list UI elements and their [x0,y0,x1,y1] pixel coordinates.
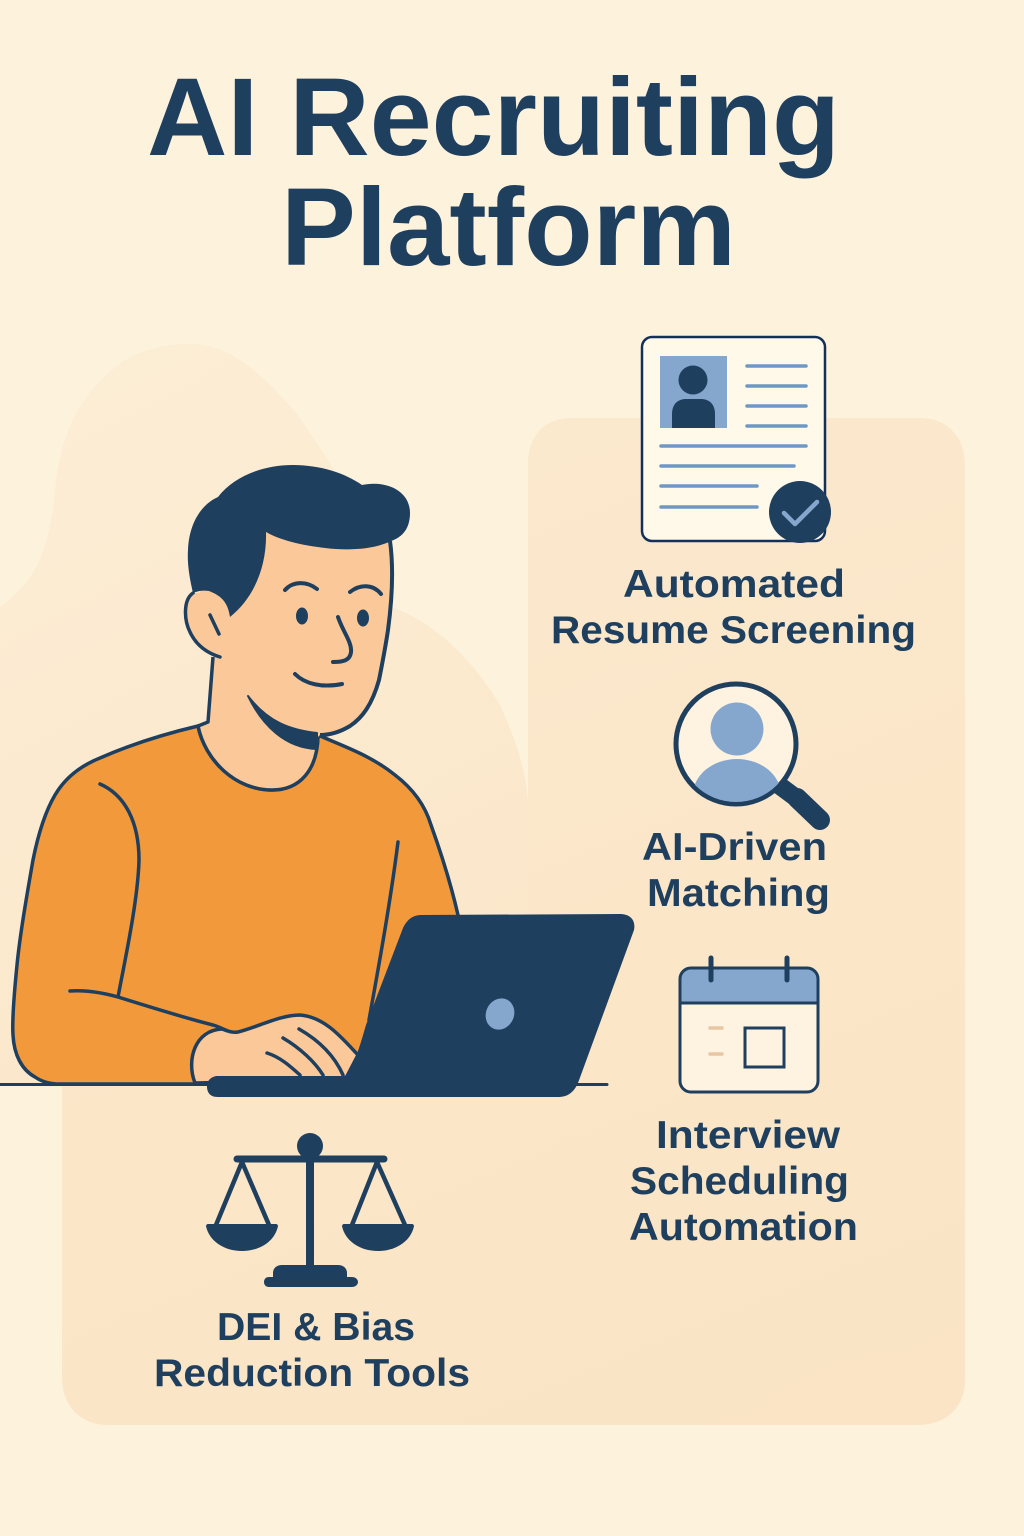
laptop logo [481,994,519,1034]
label [642,826,830,915]
label: Matching [647,872,830,915]
hand [192,1015,358,1083]
title [147,56,840,289]
label: Resume Screening [551,609,916,652]
face features [285,583,381,686]
title: Platform [281,166,736,289]
sweater fold lines [70,784,398,1032]
label: Scheduling [630,1160,849,1203]
label [154,1306,470,1395]
title: AI Recruiting [147,56,840,179]
label: Reduction Tools [154,1352,470,1395]
background blob [0,344,528,1100]
feature: interview scheduling automation [629,958,858,1249]
label: Interview [656,1114,841,1157]
ear [185,592,232,657]
icon: balance scales [206,1133,414,1287]
hair [188,465,410,617]
neck and face [198,532,392,790]
icon: resume [642,337,831,543]
chin shadow [248,696,317,749]
laptop [207,914,634,1097]
eyes [296,608,369,626]
fingers [267,1029,343,1075]
feature: ai-driven matching [642,684,830,915]
label: Automation [629,1206,858,1249]
orange sweater [13,726,458,1084]
feature: dei and bias reduction tools [154,1133,470,1395]
label: Automated [623,563,845,606]
label [629,1114,858,1249]
label [551,563,916,652]
label: DEI & Bias [217,1306,415,1349]
table line [0,1083,607,1086]
icon: magnifier with person [676,684,820,831]
feature: automated resume screening [551,337,916,652]
illustration: person at laptop [0,465,634,1097]
background panel [62,418,965,1425]
icon: calendar [680,958,818,1092]
label: AI-Driven [642,826,827,869]
